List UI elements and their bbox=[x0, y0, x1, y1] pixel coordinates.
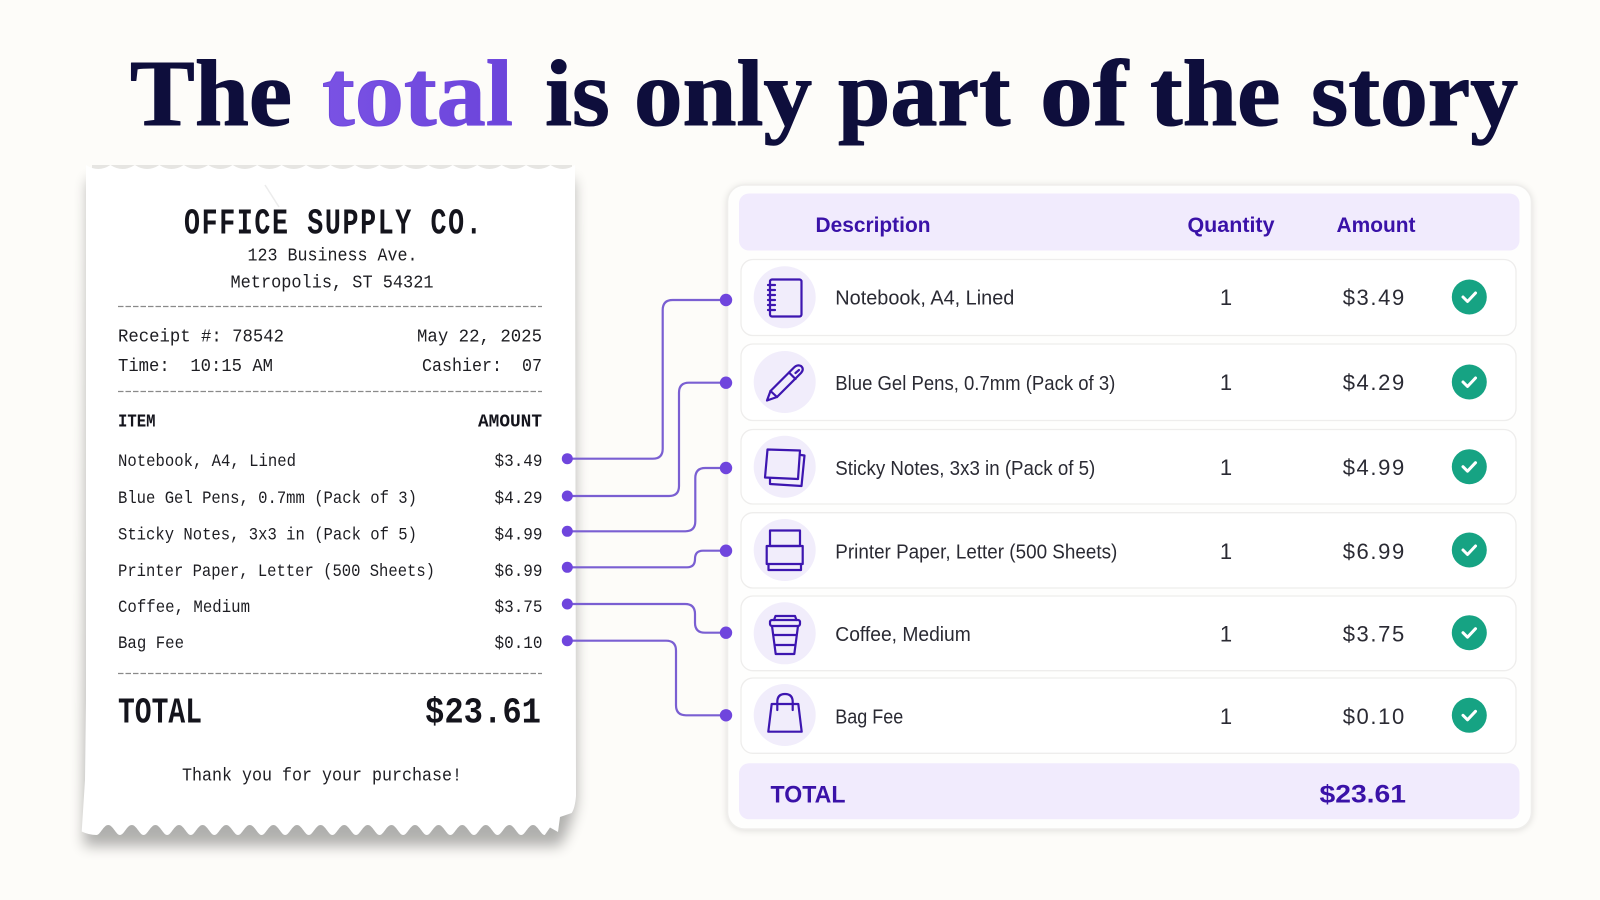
table total bar bbox=[739, 763, 1520, 819]
row: printer paper: Printer Paper, Letter (500 Sheets) bbox=[835, 542, 1117, 564]
row: printer paper bbox=[741, 513, 1516, 588]
row: pens: $4.29 bbox=[1343, 370, 1404, 395]
connector: pens bbox=[562, 376, 732, 502]
row: sticky notes: Sticky Notes, 3x3 in (Pack of 5) bbox=[835, 458, 1095, 480]
connector lines from receipt to table bbox=[562, 294, 732, 722]
row: pens: Blue Gel Pens, 0.7mm (Pack of 3) bbox=[835, 373, 1115, 395]
receipt line items bbox=[118, 452, 542, 654]
connector: bag fee bbox=[562, 635, 732, 722]
receipt line items: Sticky Notes, 3x3 in (Pack of 5) bbox=[118, 525, 417, 545]
icon: notebook bbox=[768, 280, 802, 316]
icon: check bbox=[1452, 698, 1487, 733]
receipt line items: Printer Paper, Letter (500 Sheets) bbox=[118, 562, 435, 582]
connector: notebook bbox=[562, 294, 732, 464]
row: bag fee: 1 bbox=[1220, 704, 1232, 729]
icon: sticky notes bbox=[765, 450, 804, 486]
receipt address: 123 Business Ave. bbox=[248, 246, 418, 266]
receipt column headings bbox=[118, 412, 542, 432]
receipt thank-you note: Thank you for your purchase! bbox=[182, 766, 462, 786]
receipt column headings: AMOUNT bbox=[478, 412, 542, 432]
connector: coffee bbox=[562, 598, 732, 639]
row: notebook: Notebook, A4, Lined bbox=[835, 288, 1014, 310]
connector: printer paper bbox=[562, 544, 732, 573]
receipt total: TOTAL bbox=[118, 692, 202, 734]
receipt line items: Bag Fee bbox=[118, 634, 184, 654]
table total bar: $23.61 bbox=[1320, 780, 1406, 808]
receipt metadata: Receipt #: 78542 bbox=[118, 328, 284, 348]
receipt line items: $6.99 bbox=[494, 562, 542, 582]
row: coffee: Coffee, Medium bbox=[835, 624, 971, 646]
receipt metadata: Time: 10:15 AM bbox=[118, 357, 273, 377]
receipt line items: $4.29 bbox=[494, 489, 542, 509]
row: bag fee: Bag Fee bbox=[835, 706, 903, 728]
receipt metadata: Cashier: 07 bbox=[422, 357, 542, 377]
row: pens bbox=[741, 344, 1516, 420]
title: the bbox=[1150, 42, 1280, 146]
receipt line items: Coffee, Medium bbox=[118, 598, 250, 618]
row: notebook: 1 bbox=[1220, 285, 1232, 310]
table total bar: TOTAL bbox=[770, 782, 846, 808]
title: story bbox=[1311, 42, 1518, 146]
receipt address bbox=[230, 246, 434, 294]
table header: Quantity bbox=[1188, 214, 1275, 237]
icon: check bbox=[1452, 532, 1487, 568]
row: sticky notes: 1 bbox=[1220, 455, 1232, 480]
row: coffee: $3.75 bbox=[1343, 622, 1404, 647]
receipt line items: $4.99 bbox=[494, 525, 542, 545]
row: coffee: 1 bbox=[1220, 622, 1232, 647]
connector: sticky notes bbox=[562, 462, 732, 537]
icon: check bbox=[1452, 364, 1487, 400]
receipt line items: Blue Gel Pens, 0.7mm (Pack of 3) bbox=[118, 489, 417, 509]
receipt column headings: ITEM bbox=[118, 412, 156, 432]
icon: check bbox=[1452, 449, 1487, 484]
receipt line items: Notebook, A4, Lined bbox=[118, 452, 296, 472]
title: total bbox=[322, 42, 513, 146]
row: printer paper: 1 bbox=[1220, 539, 1232, 564]
icon: check bbox=[1452, 615, 1487, 650]
row: sticky notes: $4.99 bbox=[1343, 455, 1404, 480]
receipt metadata bbox=[118, 328, 542, 377]
receipt line items: $3.49 bbox=[494, 452, 542, 472]
title: is only bbox=[545, 42, 812, 146]
table header: Amount bbox=[1336, 214, 1416, 237]
row: notebook: $3.49 bbox=[1343, 285, 1404, 310]
title: The bbox=[130, 42, 292, 146]
row: pens: 1 bbox=[1220, 370, 1232, 395]
icon: pen bbox=[767, 365, 803, 400]
panel: itemized table bbox=[728, 185, 1532, 830]
receipt total bbox=[118, 692, 541, 734]
receipt address: Metropolis, ST 54321 bbox=[230, 274, 434, 294]
title: of bbox=[1040, 42, 1130, 146]
receipt metadata: May 22, 2025 bbox=[417, 328, 542, 348]
icon: paper stack bbox=[767, 530, 803, 570]
row: bag fee: $0.10 bbox=[1343, 704, 1404, 729]
row: printer paper: $6.99 bbox=[1343, 539, 1404, 564]
row: coffee bbox=[741, 596, 1516, 671]
row: bag fee bbox=[741, 678, 1516, 753]
icon: shopping bag bbox=[768, 694, 802, 732]
table header: Description bbox=[816, 214, 930, 237]
panel: paper receipt bbox=[82, 165, 576, 846]
receipt store name: OFFICE SUPPLY CO. bbox=[184, 204, 483, 245]
receipt line items: $3.75 bbox=[494, 598, 542, 618]
table header bbox=[739, 194, 1520, 250]
row: notebook bbox=[741, 260, 1516, 336]
receipt total: $23.61 bbox=[425, 692, 541, 734]
icon: coffee cup bbox=[770, 616, 800, 654]
title bbox=[130, 42, 1518, 146]
receipt line items: $0.10 bbox=[494, 634, 542, 654]
icon: check bbox=[1452, 280, 1487, 314]
row: sticky notes bbox=[741, 430, 1516, 504]
title: part bbox=[838, 42, 1010, 146]
